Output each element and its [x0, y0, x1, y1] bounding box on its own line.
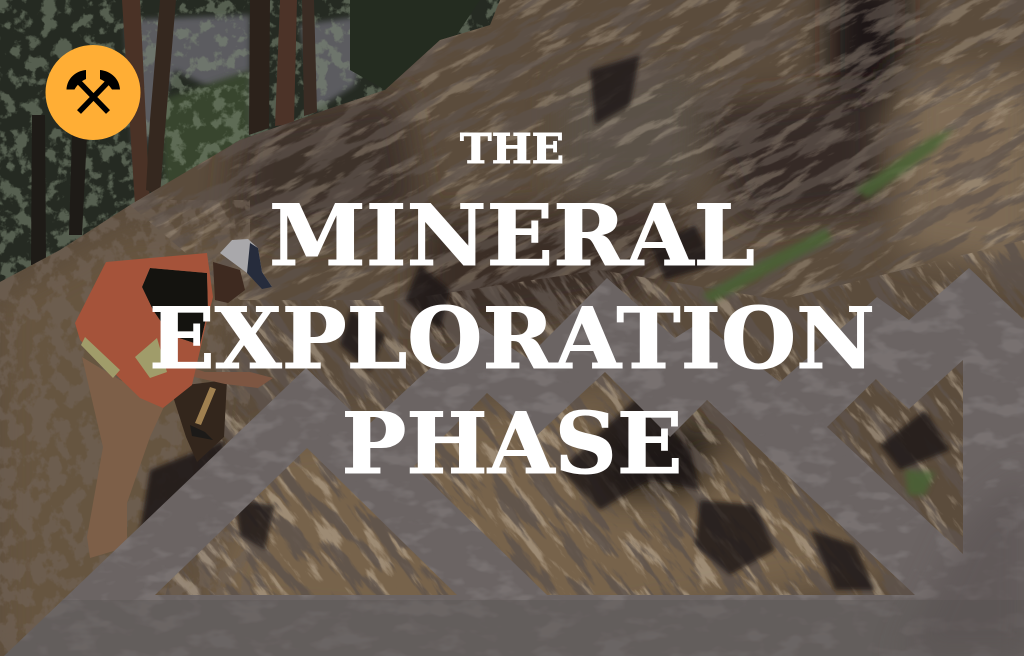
photo: green plants: [702, 128, 955, 495]
title line: MINERAL: MINERAL: [269, 186, 755, 285]
title line: EXPLORATION: EXPLORATION: [149, 289, 875, 388]
title line: PHASE: PHASE: [342, 394, 682, 493]
photo: pine trunks: [31, 0, 535, 265]
photo: geologist: [75, 239, 273, 558]
person: hammer: [195, 387, 216, 425]
person: back leg: [170, 380, 227, 462]
title: [149, 125, 875, 493]
icon: crossed mining hammers badge: [46, 45, 140, 140]
title line: THE: THE: [460, 125, 564, 173]
person: orange vest: [75, 253, 213, 408]
person: face and beard: [213, 262, 245, 303]
person: black shirt: [142, 268, 208, 345]
photo: shadow beside the geologist's legs: [138, 438, 227, 528]
person: reflective stripes: [81, 337, 167, 378]
photo: rock strata texture: [130, 0, 1024, 300]
translucent mountain outline graphic: [4, 268, 1024, 656]
photo: dry grass slope texture: [0, 200, 250, 656]
photo: dark rock shadows: [235, 55, 950, 590]
person: arm: [170, 360, 273, 388]
person: cap: [220, 239, 272, 288]
person: front leg: [82, 357, 167, 558]
photo: forest backdrop: [0, 0, 1024, 300]
